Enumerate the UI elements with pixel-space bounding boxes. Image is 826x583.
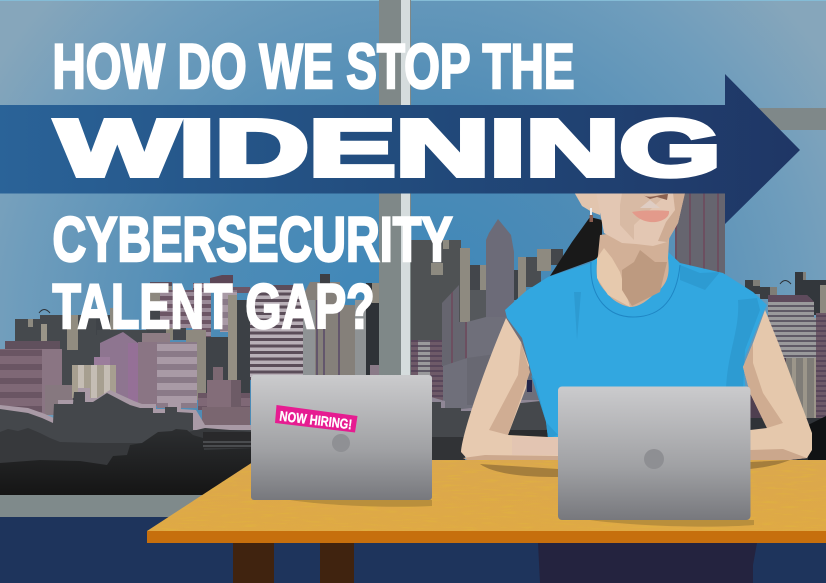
pink mid-rise with stripes	[138, 333, 197, 408]
purple tower behind the face	[675, 190, 725, 275]
table edge	[147, 531, 826, 543]
arrow banner	[0, 74, 800, 224]
sticker: now hiring	[275, 405, 358, 432]
laptop logo	[332, 434, 350, 452]
birds	[39, 280, 791, 313]
dark back blocks	[15, 308, 147, 405]
purple pentagon tower	[94, 332, 138, 405]
mid grey skyline	[0, 392, 255, 495]
title line 2: WIDENING	[56, 103, 721, 193]
face	[596, 192, 685, 246]
far right blocks	[745, 272, 826, 462]
city skyline: left of pillar	[0, 274, 379, 427]
person legs	[538, 543, 757, 583]
left arm	[461, 318, 558, 469]
arm shadows on table	[480, 460, 790, 477]
pale halo	[0, 388, 255, 440]
laptop: front	[558, 386, 754, 527]
pink striped block	[0, 341, 73, 417]
window frame: vertical pillar	[379, 0, 411, 375]
neck	[597, 225, 670, 307]
sticker: now hiring: NOW HIRING!	[279, 408, 353, 432]
hair	[550, 217, 602, 276]
title line 3: CYBERSECURITY	[52, 205, 452, 275]
title line 1: HOW DO WE STOP THE	[52, 32, 574, 102]
table	[147, 460, 826, 583]
table legs	[233, 543, 354, 583]
shirt folds	[726, 298, 760, 390]
title	[52, 32, 721, 342]
tan vertical block	[72, 365, 116, 398]
person	[461, 192, 812, 469]
pink striped block	[411, 340, 444, 402]
window frame: right crossbar	[750, 108, 826, 130]
lips	[632, 210, 669, 222]
right arm	[743, 310, 812, 462]
laptop: left	[251, 375, 432, 507]
nose	[643, 194, 668, 200]
low pink block	[198, 367, 250, 427]
window sill	[0, 495, 260, 517]
lavender towers	[442, 285, 459, 366]
collar seam	[591, 262, 680, 317]
darker band	[0, 428, 255, 495]
city foreground silhouettes	[0, 388, 255, 495]
laptop logo	[644, 449, 664, 469]
lower wall	[0, 517, 826, 583]
title line 4: TALENT GAP?	[52, 272, 374, 342]
black trees	[0, 429, 255, 495]
table top	[147, 460, 826, 531]
wood grain	[147, 460, 826, 531]
shirt	[505, 250, 767, 440]
rear towers	[146, 275, 250, 400]
ear and earring	[574, 192, 600, 222]
city skyline: right of pillar	[411, 190, 826, 465]
low pale trim and dark block	[431, 397, 550, 440]
striped office tower	[250, 285, 303, 380]
pale vertical block	[303, 274, 379, 380]
